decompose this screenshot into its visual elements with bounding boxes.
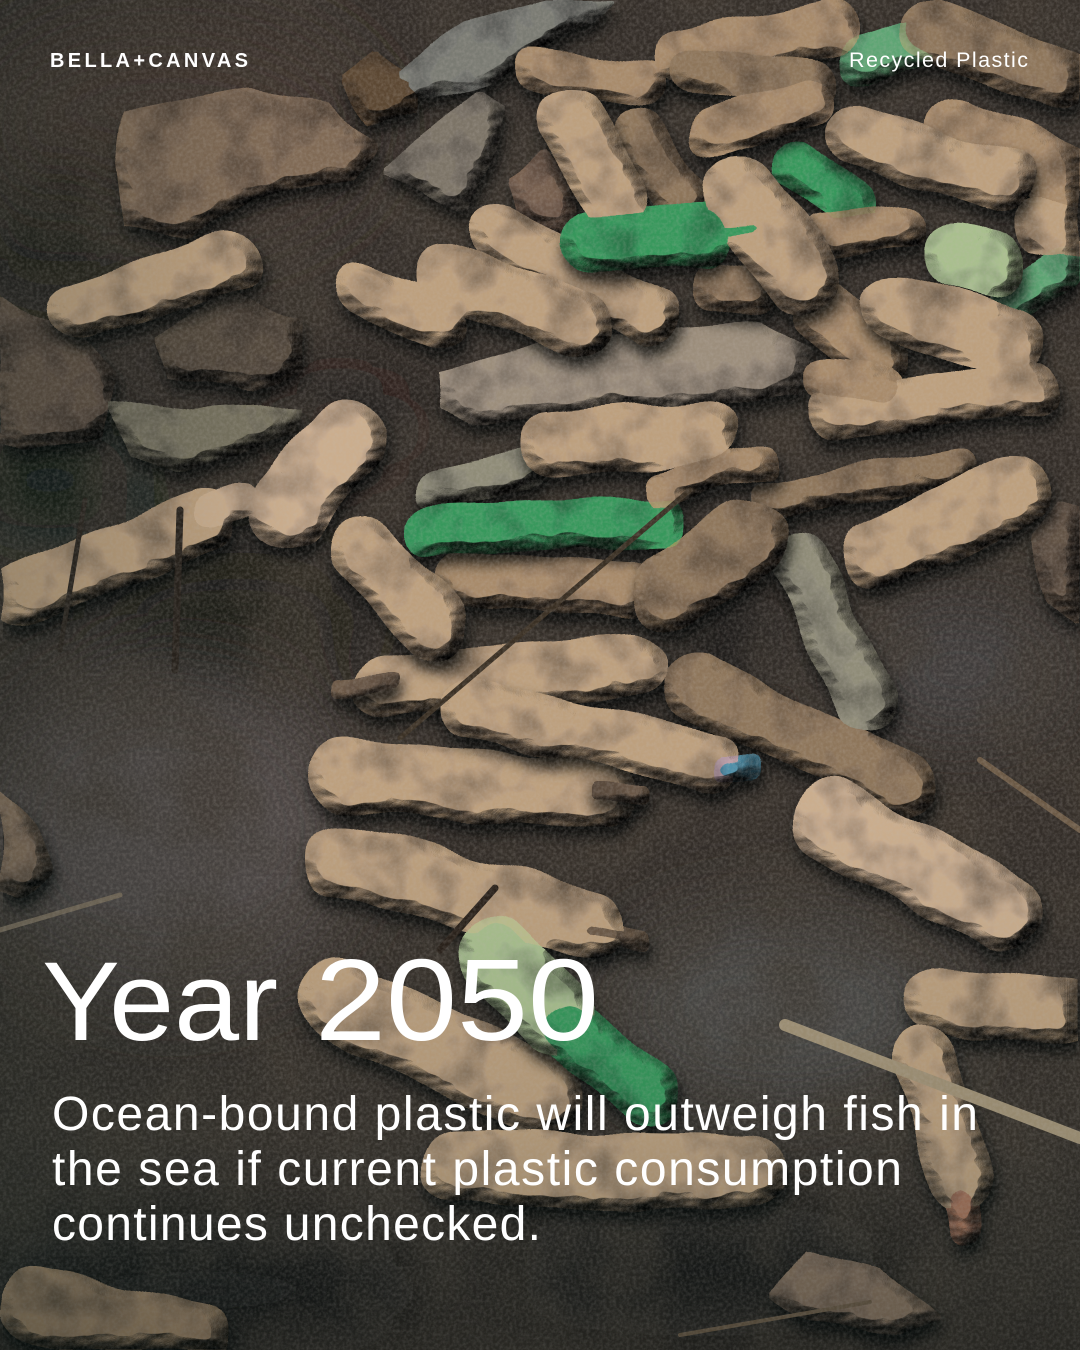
brand logo: BELLA+CANVAS [50,50,248,72]
plastic bottles: back layer at the top of the pile [340,28,1080,1095]
body text [52,1088,978,1251]
body text: continues unchecked. [52,1198,541,1251]
body text: Ocean-bound plastic will outweigh fish in [52,1088,978,1141]
headline: 2050 [315,935,599,1065]
headline: Year [42,939,278,1064]
section label: Recycled Plastic [849,48,1028,72]
body text: the sea if current plastic consumption [52,1143,902,1196]
sticks [0,490,1080,1335]
headline [42,935,599,1065]
